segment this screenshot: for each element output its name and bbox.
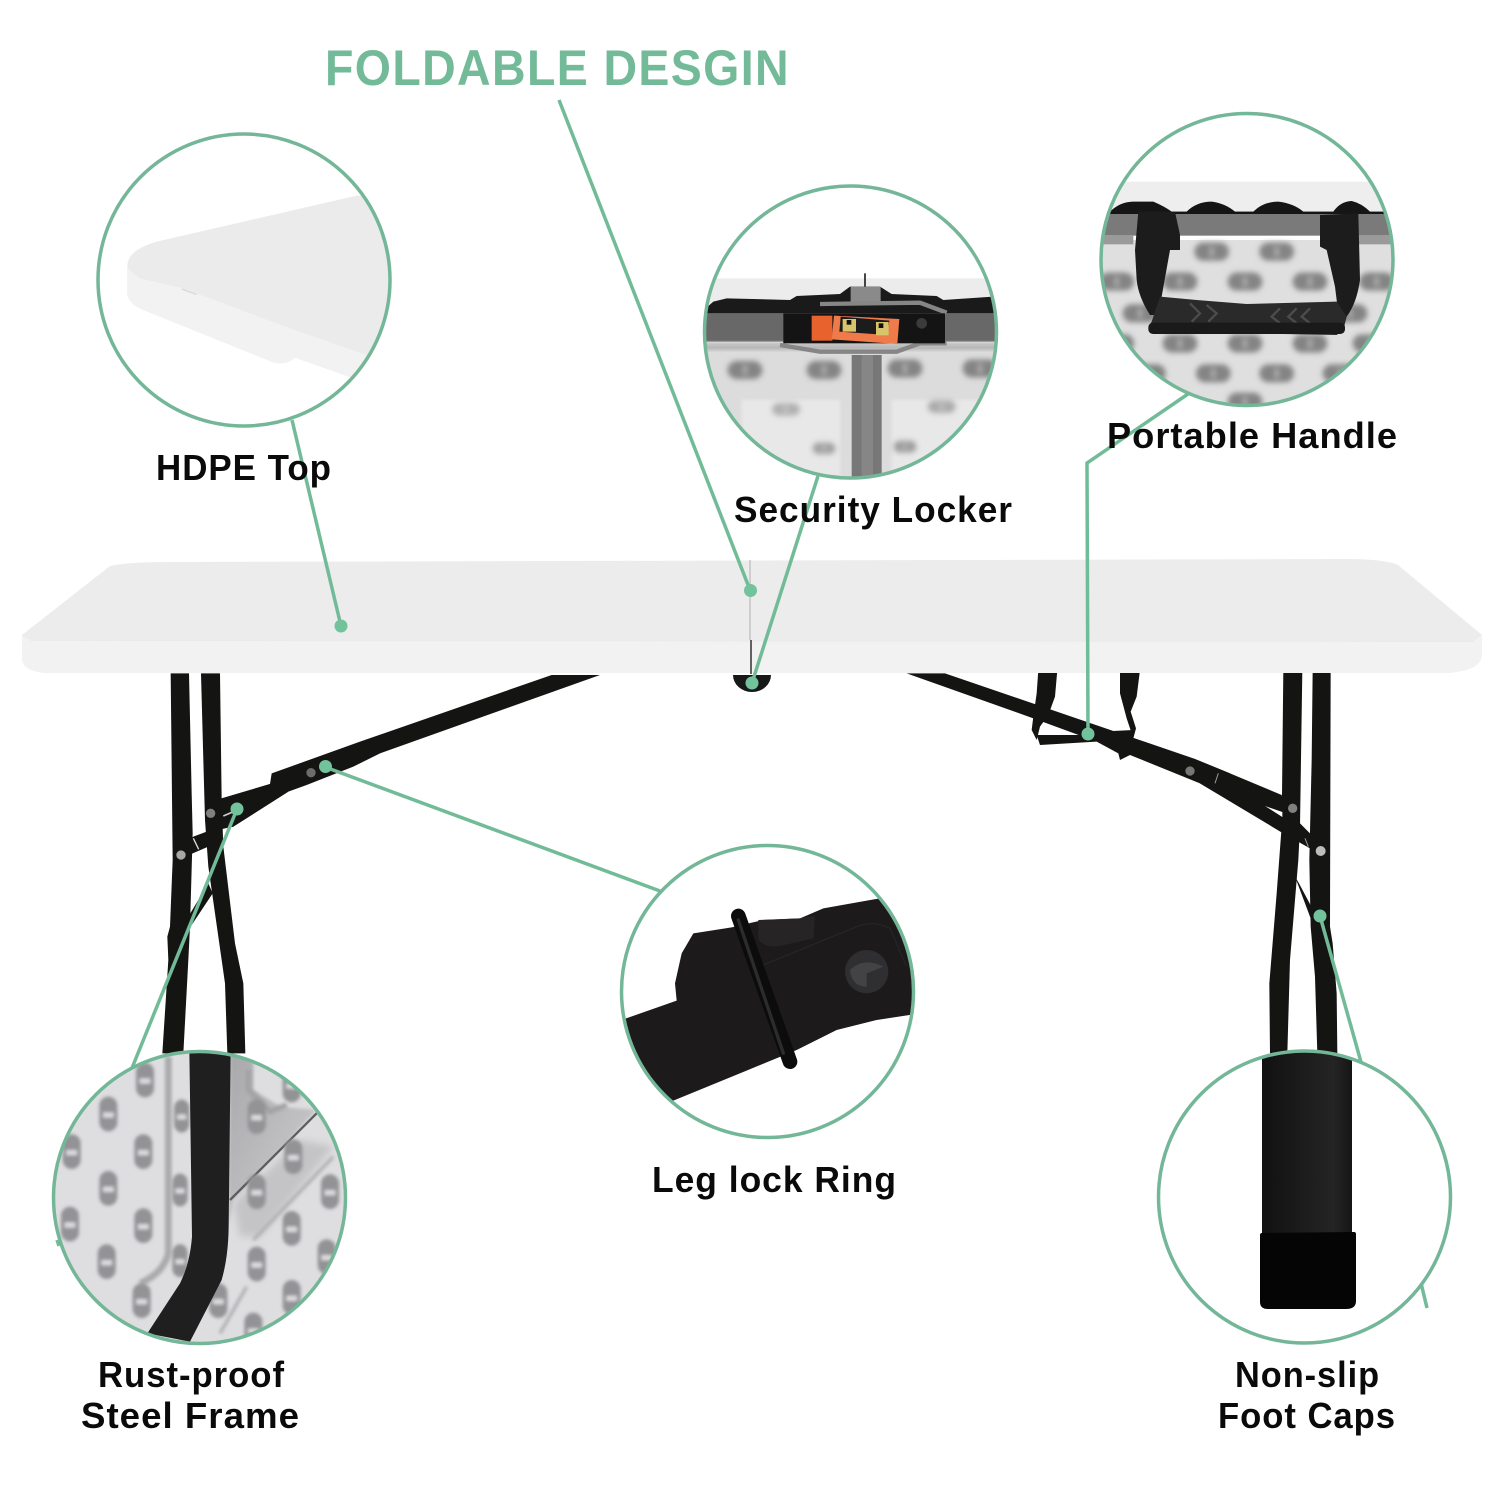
label: leg lock ring: Leg lock Ring — [652, 1159, 897, 1200]
callout: portable handle detail — [1093, 114, 1400, 413]
label: non-slip foot caps: Foot Caps — [1218, 1395, 1396, 1436]
callout: HDPE top detail — [98, 134, 407, 426]
leader line: HDPE top — [292, 420, 348, 632]
callout: security locker detail — [700, 186, 1007, 482]
label: security locker: Security Locker — [734, 489, 1013, 530]
label: HDPE top: HDPE Top — [156, 447, 332, 488]
label: rust-proof steel frame: Rust-proof — [98, 1354, 285, 1395]
left folding legs and brace — [162, 673, 600, 1053]
vertical beam — [852, 355, 882, 482]
label: portable handle: Portable Handle — [1107, 415, 1398, 456]
handle straps and grip — [1135, 212, 1180, 315]
center hinge bracket — [733, 675, 771, 692]
black leg tube — [147, 1050, 231, 1342]
plate underside — [700, 278, 1000, 305]
leader line: portable handle — [1082, 394, 1188, 740]
label: non-slip foot caps: Non-slip — [1235, 1354, 1380, 1395]
label: non-slip foot caps — [1218, 1354, 1396, 1436]
callout: rust-proof steel frame detail — [54, 1050, 346, 1347]
orange latch — [812, 316, 832, 341]
label: rust-proof steel frame: Steel Frame — [81, 1395, 300, 1436]
label: rust-proof steel frame — [81, 1354, 300, 1436]
leader line: foldable design — [559, 100, 757, 597]
callout: leg lock ring detail — [617, 846, 920, 1138]
table top — [22, 559, 1482, 674]
leader line: steel frame — [57, 802, 244, 1246]
title: FOLDABLE DESGIN — [325, 40, 790, 96]
leader line: foot caps — [1314, 910, 1427, 1308]
leader line: leg lock ring — [319, 760, 660, 891]
right folding legs, brace and handle straps — [907, 670, 1337, 1053]
leader line: security locker — [746, 476, 818, 690]
callout: non-slip foot cap detail — [1158, 1045, 1450, 1343]
black rib and hinge — [700, 287, 1007, 313]
